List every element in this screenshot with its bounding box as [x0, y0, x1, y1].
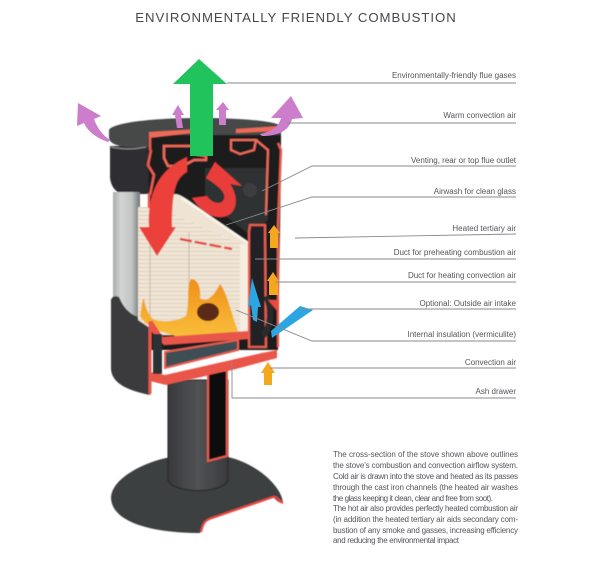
description paragraph: The cross-section of the stove shown above outlines [333, 450, 518, 459]
description paragraph: bustion of any smoke and gasses, increasing efficiency [333, 526, 518, 535]
bottom casting [148, 321, 152, 394]
label outside air: Optional: Outside air intake [420, 299, 517, 308]
duct [249, 225, 266, 347]
yellow arrows [261, 225, 280, 385]
label venting: Venting, rear or top flue outlet [411, 156, 517, 165]
label tertiary: Heated tertiary air [452, 224, 516, 233]
blue outside air intake arrows [248, 278, 313, 338]
lid [109, 118, 281, 147]
label warm air: Warm convection air [443, 111, 516, 120]
green flue gas arrow [173, 59, 227, 156]
firebox floor [150, 320, 248, 345]
ash drawer [165, 340, 238, 368]
stove body [109, 118, 281, 395]
label convection: Convection air [465, 358, 516, 367]
description paragraph [333, 450, 518, 545]
curved inlet baffle [263, 296, 270, 336]
label insulation: Internal insulation (vermiculite) [408, 330, 516, 339]
description paragraph: the stove's combustion and convection airflow system. [333, 461, 518, 470]
right pink arrow [260, 96, 303, 136]
small pink arrow right [216, 102, 229, 125]
upper casting [164, 146, 206, 166]
fire centre [197, 303, 219, 321]
left wall casting [148, 131, 200, 208]
upper band [110, 146, 152, 194]
label flue gases: Environmentally-friendly flue gases [392, 71, 516, 80]
glass [113, 192, 140, 325]
pedestal slot [208, 370, 227, 461]
right wall red fin [268, 300, 279, 312]
pink convection arrows [77, 96, 303, 142]
left pink arrow [77, 103, 110, 142]
label ash drawer: Ash drawer [476, 387, 516, 396]
label airwash: Airwash for clean glass [434, 187, 516, 196]
description paragraph: The hot air also provides perfectly heated combustion air [333, 504, 518, 513]
lower band [111, 296, 150, 395]
description paragraph: the glass keeping it clean, clear and free from soot). [333, 494, 493, 503]
firebox side panel line [150, 222, 189, 330]
fan housing [205, 168, 268, 235]
label heating duct: Duct for heating convection air [408, 271, 516, 280]
firebox brick wall [138, 207, 241, 335]
base plate [111, 457, 283, 533]
firebox right lining [240, 244, 248, 332]
lid ring highlight [111, 147, 146, 149]
description paragraph: (in addition the heated tertiary air aids secondary com- [333, 515, 518, 524]
blue upward arrow [248, 278, 261, 322]
title: ENVIRONMENTALLY FRIENDLY COMBUSTION [135, 10, 457, 25]
base red cut edge [201, 497, 283, 532]
interior dark [148, 135, 281, 350]
leader lines [226, 83, 516, 398]
description paragraph: Cold air is drawn into the stove and heated as its passes [333, 472, 518, 481]
lid right cut [236, 126, 280, 133]
baffle flames marks [180, 239, 232, 249]
red hot air arrow left [139, 157, 187, 256]
fire [140, 279, 238, 337]
yellow arrow middle [267, 272, 279, 295]
blue stream [271, 306, 313, 338]
stove pedestal and base [111, 370, 283, 533]
pedestal column [168, 380, 228, 490]
description paragraph: and reducing the environmental impact [333, 536, 460, 545]
label preheating duct: Duct for preheating combustion air [394, 248, 516, 257]
baffle plate [170, 194, 248, 246]
right wall casting [278, 143, 281, 347]
small pink arrow left [172, 105, 184, 128]
yellow arrow upper [268, 225, 280, 248]
labels [392, 71, 517, 396]
description paragraph: through the cast iron channels (the heated air washes [333, 483, 518, 492]
left casting cavity [153, 334, 162, 374]
red hot air arrow right [192, 162, 242, 217]
yellow arrow bottom [261, 362, 275, 385]
